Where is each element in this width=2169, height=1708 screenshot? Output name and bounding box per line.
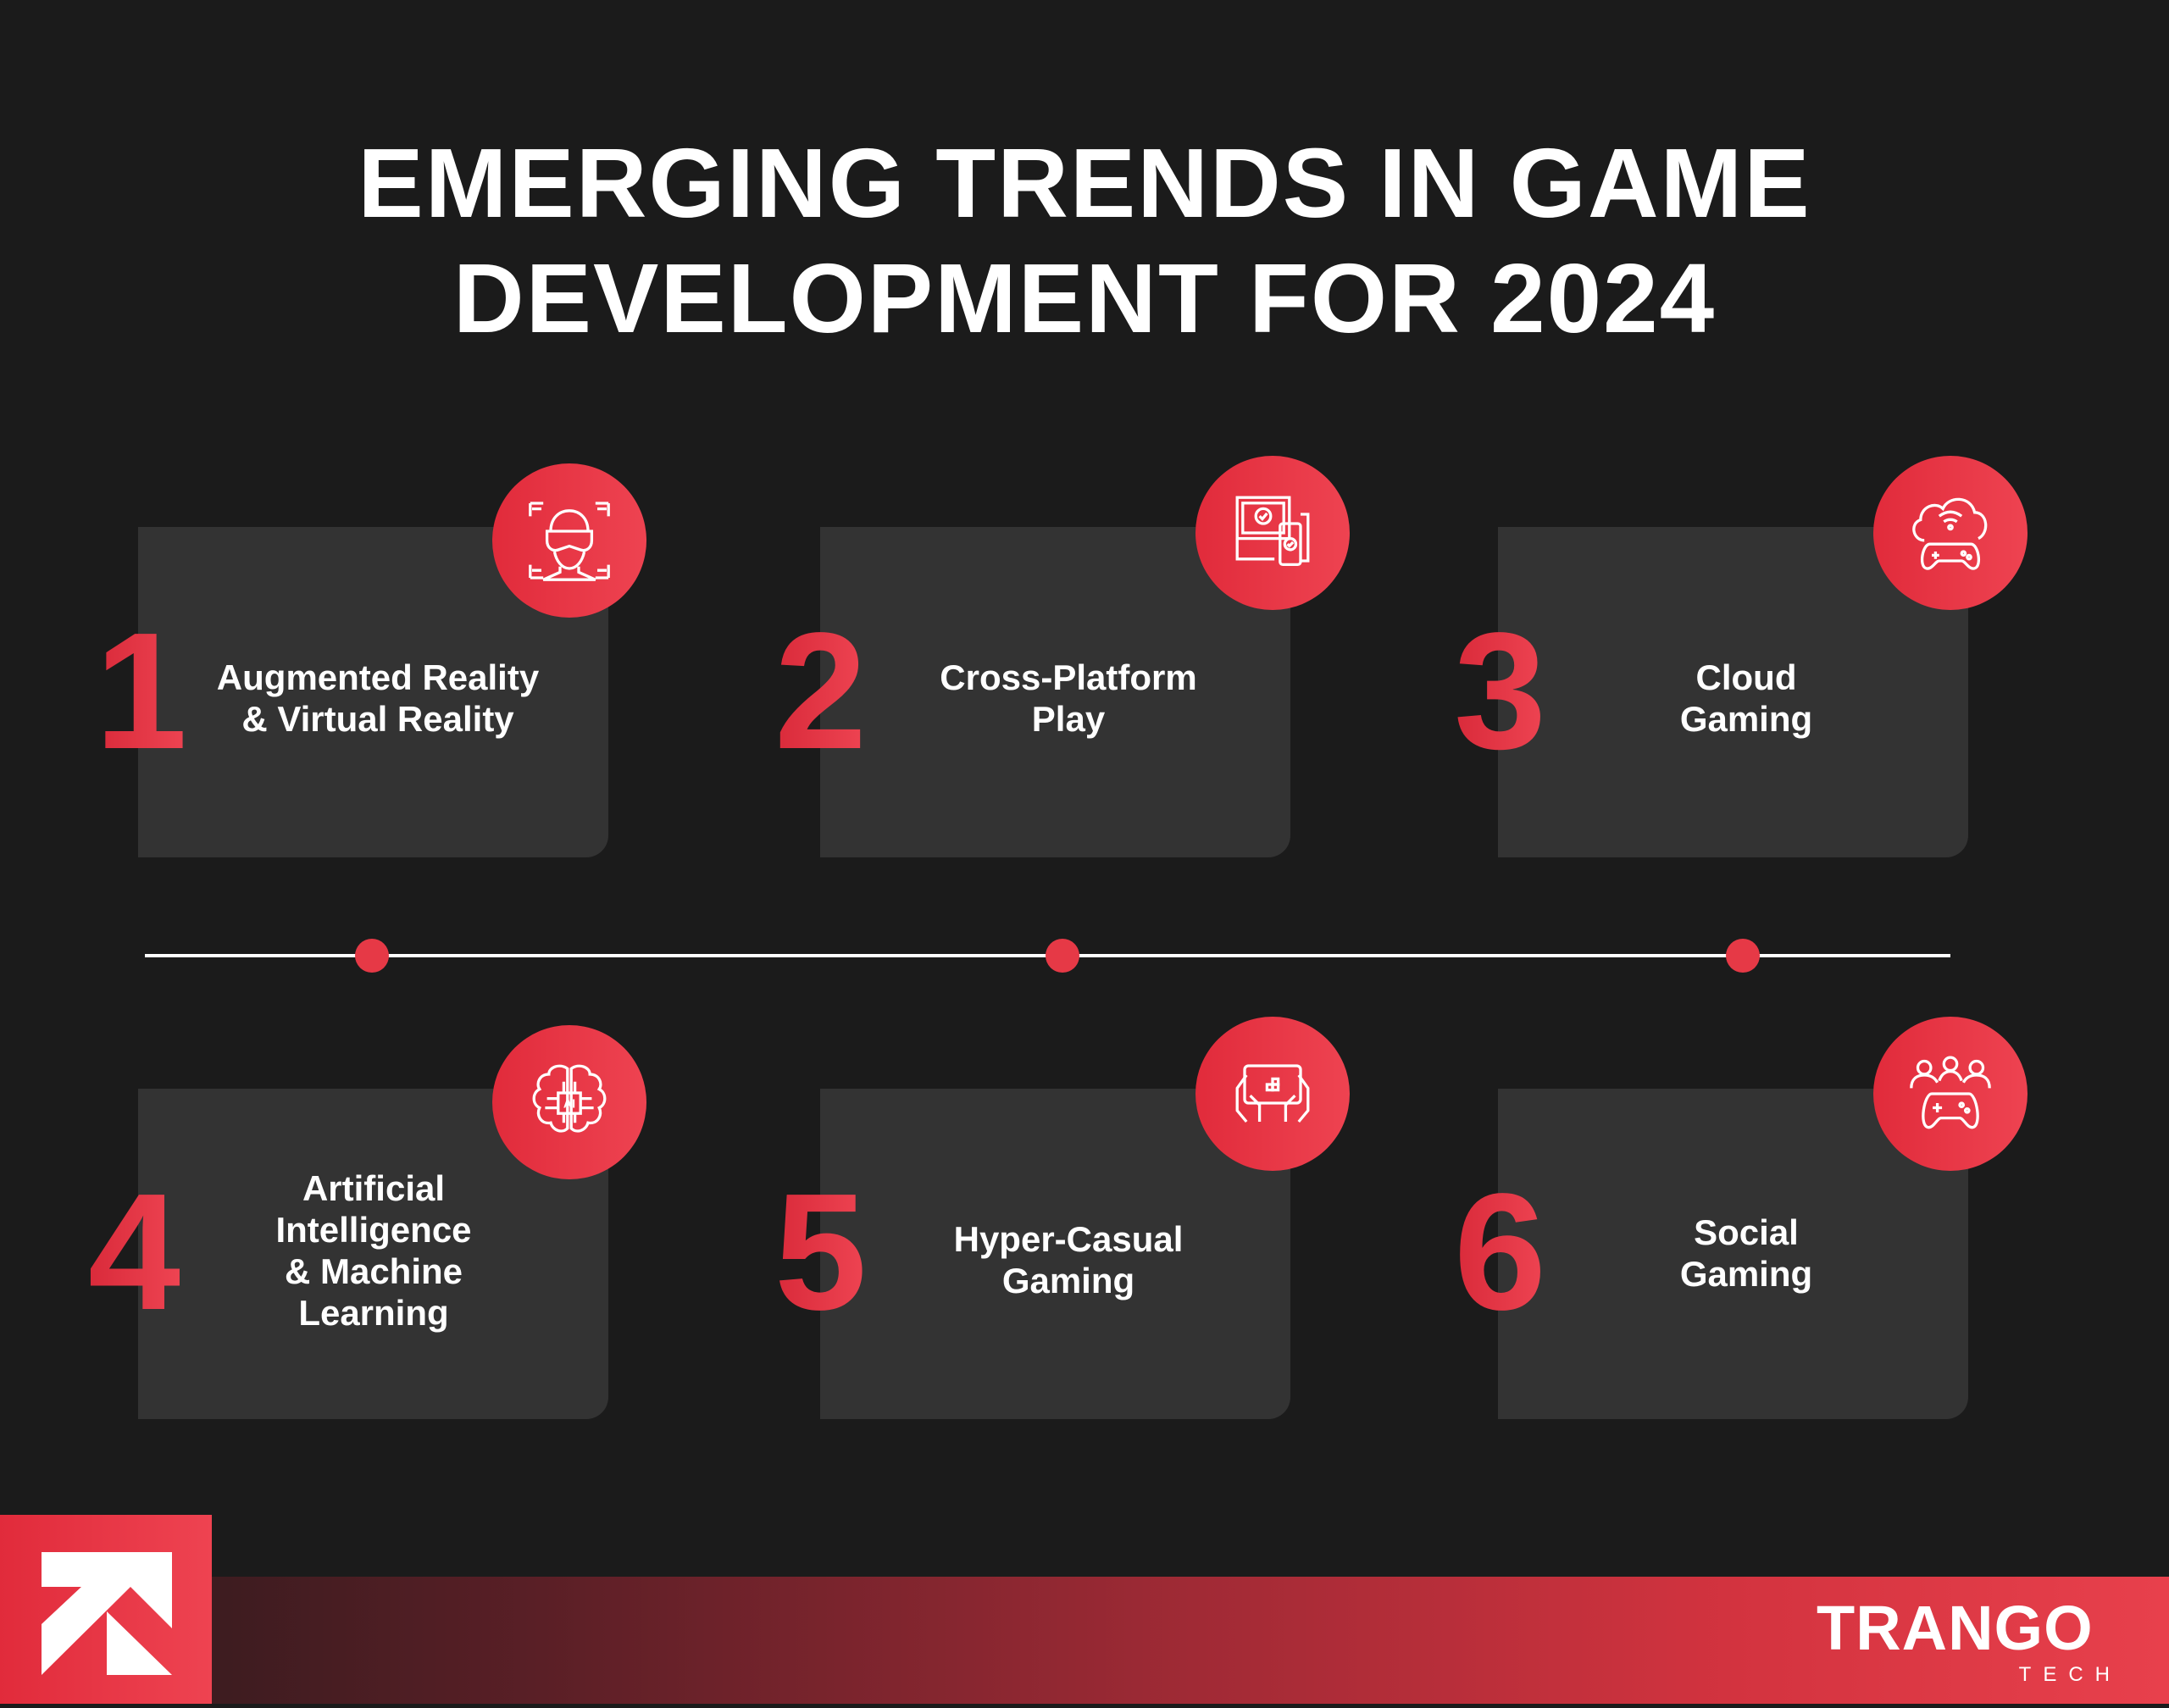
label 4: & Machine xyxy=(285,1251,463,1291)
number 6: 6 xyxy=(1454,1159,1546,1345)
card 4 xyxy=(138,1089,608,1419)
logo: TRANGO TECH: TECH xyxy=(2019,1663,2122,1686)
label 2: Cross-Platform xyxy=(940,657,1197,697)
label 5: Hyper-Casual xyxy=(954,1219,1183,1259)
label 6 xyxy=(1680,1212,1812,1294)
logo mark xyxy=(0,1515,212,1704)
card 3 xyxy=(1498,527,1968,857)
icon: VR headset xyxy=(492,463,646,618)
card 6 xyxy=(1498,1089,1968,1419)
icon: social gaming xyxy=(1873,1017,2028,1171)
label 6: Gaming xyxy=(1680,1254,1812,1294)
title: EMERGING TRENDS IN GAME xyxy=(358,128,1811,238)
label 4 xyxy=(275,1168,472,1333)
label 3: Cloud xyxy=(1696,657,1796,697)
label 3 xyxy=(1680,657,1812,739)
label 2 xyxy=(940,657,1197,739)
label 1 xyxy=(217,657,539,739)
label 6: Social xyxy=(1694,1212,1799,1252)
label 2: Play xyxy=(1032,699,1105,739)
number 4: 4 xyxy=(88,1159,180,1345)
card 5 xyxy=(820,1089,1290,1419)
label 5: Gaming xyxy=(1002,1261,1134,1300)
label 5 xyxy=(954,1219,1183,1300)
number 5: 5 xyxy=(774,1159,867,1345)
card 1 xyxy=(138,527,608,857)
label 1: Augmented Reality xyxy=(217,657,539,697)
logo: TRANGO TECH: TRANGO xyxy=(1817,1593,2094,1663)
label 1: & Virtual Reality xyxy=(241,699,514,739)
icon: devices xyxy=(1195,456,1350,610)
label 4: Learning xyxy=(298,1293,449,1333)
dot 3 xyxy=(1726,939,1760,973)
timeline xyxy=(145,954,1950,957)
icon: AI brain xyxy=(492,1025,646,1179)
dot 1 xyxy=(355,939,389,973)
number 3: 3 xyxy=(1454,598,1546,784)
dot 2 xyxy=(1046,939,1079,973)
icon: AI brain: AI xyxy=(563,1098,575,1112)
label 3: Gaming xyxy=(1680,699,1812,739)
icon: tablet hands xyxy=(1195,1017,1350,1171)
logo: TRANGO TECH xyxy=(1817,1593,2122,1686)
number 2: 2 xyxy=(774,598,867,784)
title: DEVELOPMENT FOR 2024 xyxy=(453,243,1716,353)
title xyxy=(358,128,1811,353)
footer band xyxy=(0,1577,2169,1704)
label 4: Artificial xyxy=(302,1168,445,1208)
number 1: 1 xyxy=(95,598,187,784)
label 4: Intelligence xyxy=(275,1210,472,1250)
icon: cloud gaming xyxy=(1873,456,2028,610)
card 2 xyxy=(820,527,1290,857)
